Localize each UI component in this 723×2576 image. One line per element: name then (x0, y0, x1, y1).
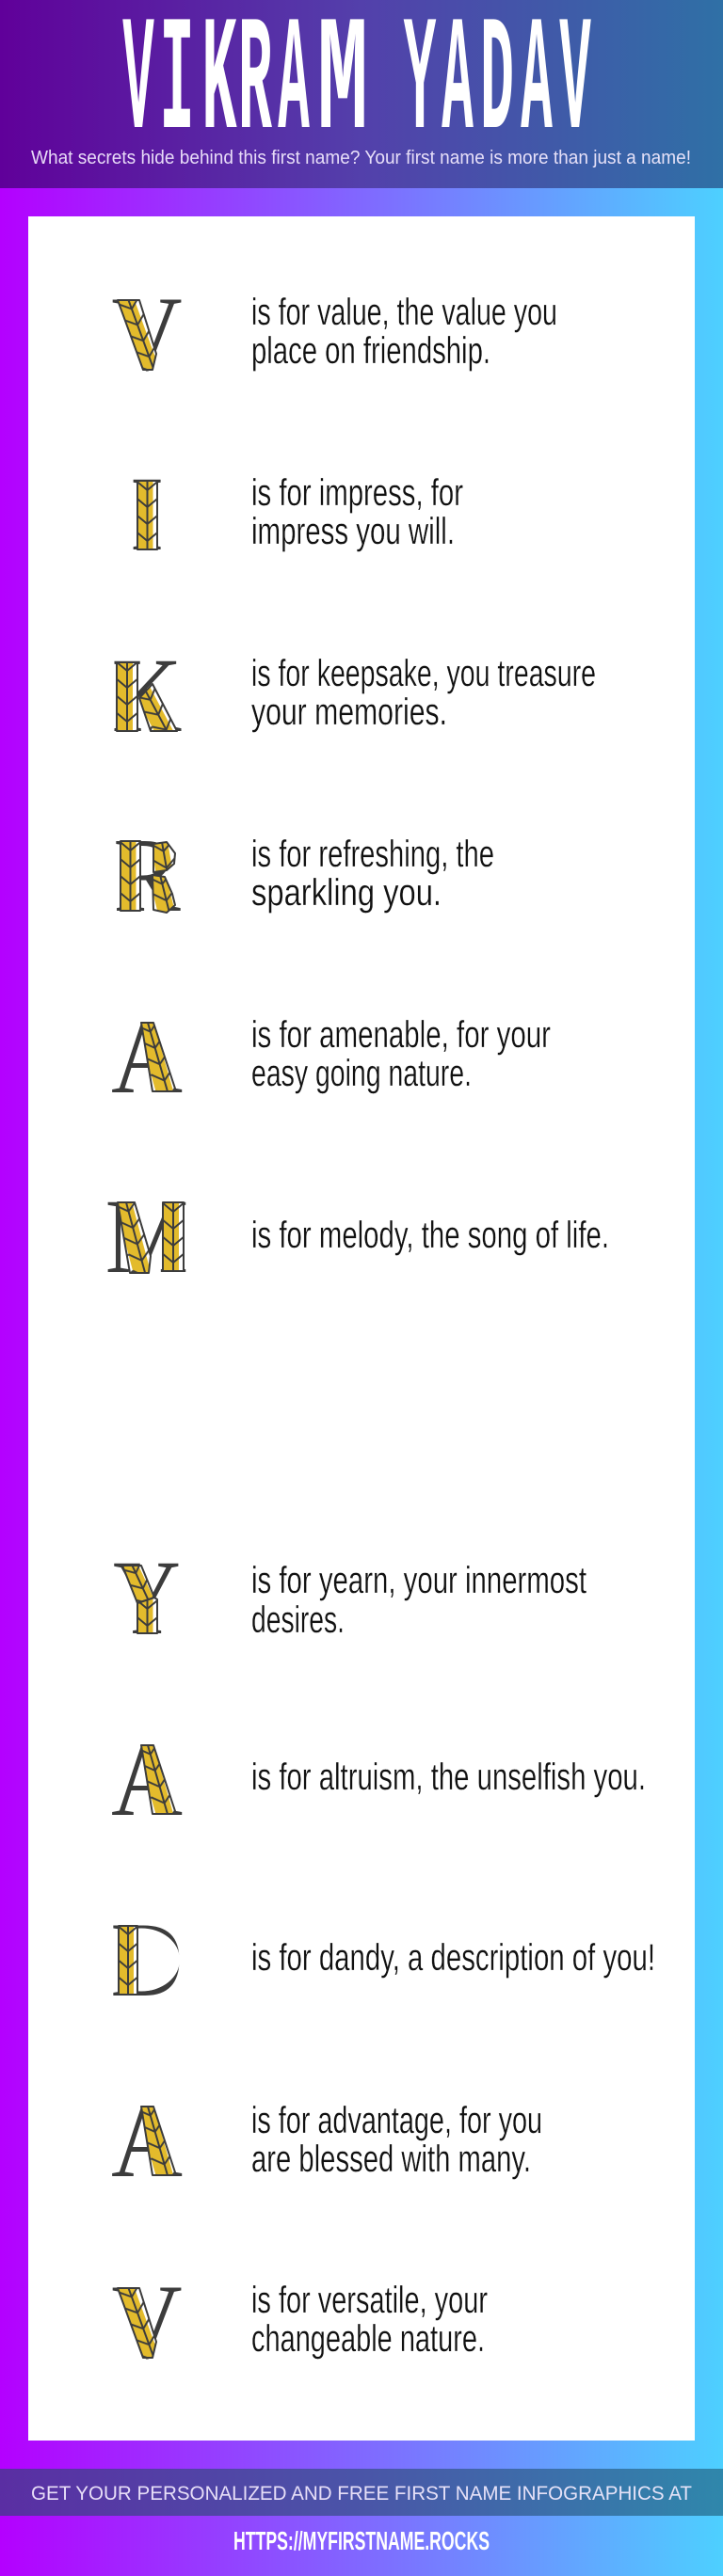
icon: letter K: K (111, 637, 183, 755)
icon: letter I: I (130, 455, 164, 573)
subtitle: What secrets hide behind this first name? Your first name is more than just a name! (31, 148, 691, 168)
row: Y (113, 1539, 586, 1657)
icon: letter M: M (105, 1178, 188, 1296)
text: R line (251, 834, 494, 914)
text: A line: easy going nature. (251, 1053, 472, 1094)
row: R (113, 817, 494, 934)
header band (0, 0, 723, 188)
row: A (111, 998, 551, 1116)
icon: letter V: V (111, 276, 183, 393)
text: I line: impress you will. (251, 511, 455, 552)
footer call to action: GET YOUR PERSONALIZED AND FREE FIRST NAME INFOGRAPHICS AT (31, 2483, 692, 2504)
row: A (111, 2082, 542, 2200)
text: Y line: desires. (251, 1599, 345, 1641)
icon: letter A: A (111, 998, 183, 1116)
text: K line: is for keepsake, you treasure (251, 653, 596, 694)
text: A line: is for amenable, for your (251, 1014, 551, 1056)
icon: letter A: A (111, 1721, 183, 1838)
text: K line: your memories. (251, 692, 447, 733)
text: V line: is for versatile, your (251, 2280, 488, 2321)
text: A line (251, 1014, 551, 1094)
footer band (0, 2469, 723, 2516)
title: VIKRAM YADAV (122, 0, 591, 177)
row: I (130, 455, 463, 573)
row: A (111, 1721, 646, 1838)
text: K line (251, 653, 596, 733)
text: I line (251, 472, 463, 552)
text: V line (251, 292, 557, 372)
icon: letter A: A (111, 2082, 183, 2200)
row: M (105, 1178, 609, 1296)
white content panel (28, 216, 695, 2441)
text: A line (251, 2100, 542, 2180)
text: R line: sparkling you. (251, 872, 442, 914)
text: V line (251, 2280, 488, 2360)
footer url: HTTPS://MYFIRSTNAME.ROCKS (233, 2526, 490, 2555)
icon: letter V: V (111, 2264, 183, 2381)
text: A line: are blessed with many. (251, 2139, 531, 2180)
text: V line: is for value, the value you (251, 292, 557, 333)
text: I line: is for impress, for (251, 472, 463, 514)
icon: letter Y: Y (113, 1539, 181, 1657)
text: A line: is for advantage, for you (251, 2100, 542, 2141)
row: D (103, 1901, 655, 2019)
text: V line: changeable nature. (251, 2318, 485, 2360)
row: V (111, 2264, 488, 2381)
text: Y line (251, 1560, 586, 1641)
row: V (111, 276, 557, 393)
text: Y line: is for yearn, your innermost (251, 1560, 586, 1601)
text: R line: is for refreshing, the (251, 834, 494, 875)
icon: letter D: D (110, 1901, 184, 2019)
icon: letter R: R (113, 817, 181, 934)
text: V line: place on friendship. (251, 330, 490, 372)
row: K (111, 637, 596, 755)
